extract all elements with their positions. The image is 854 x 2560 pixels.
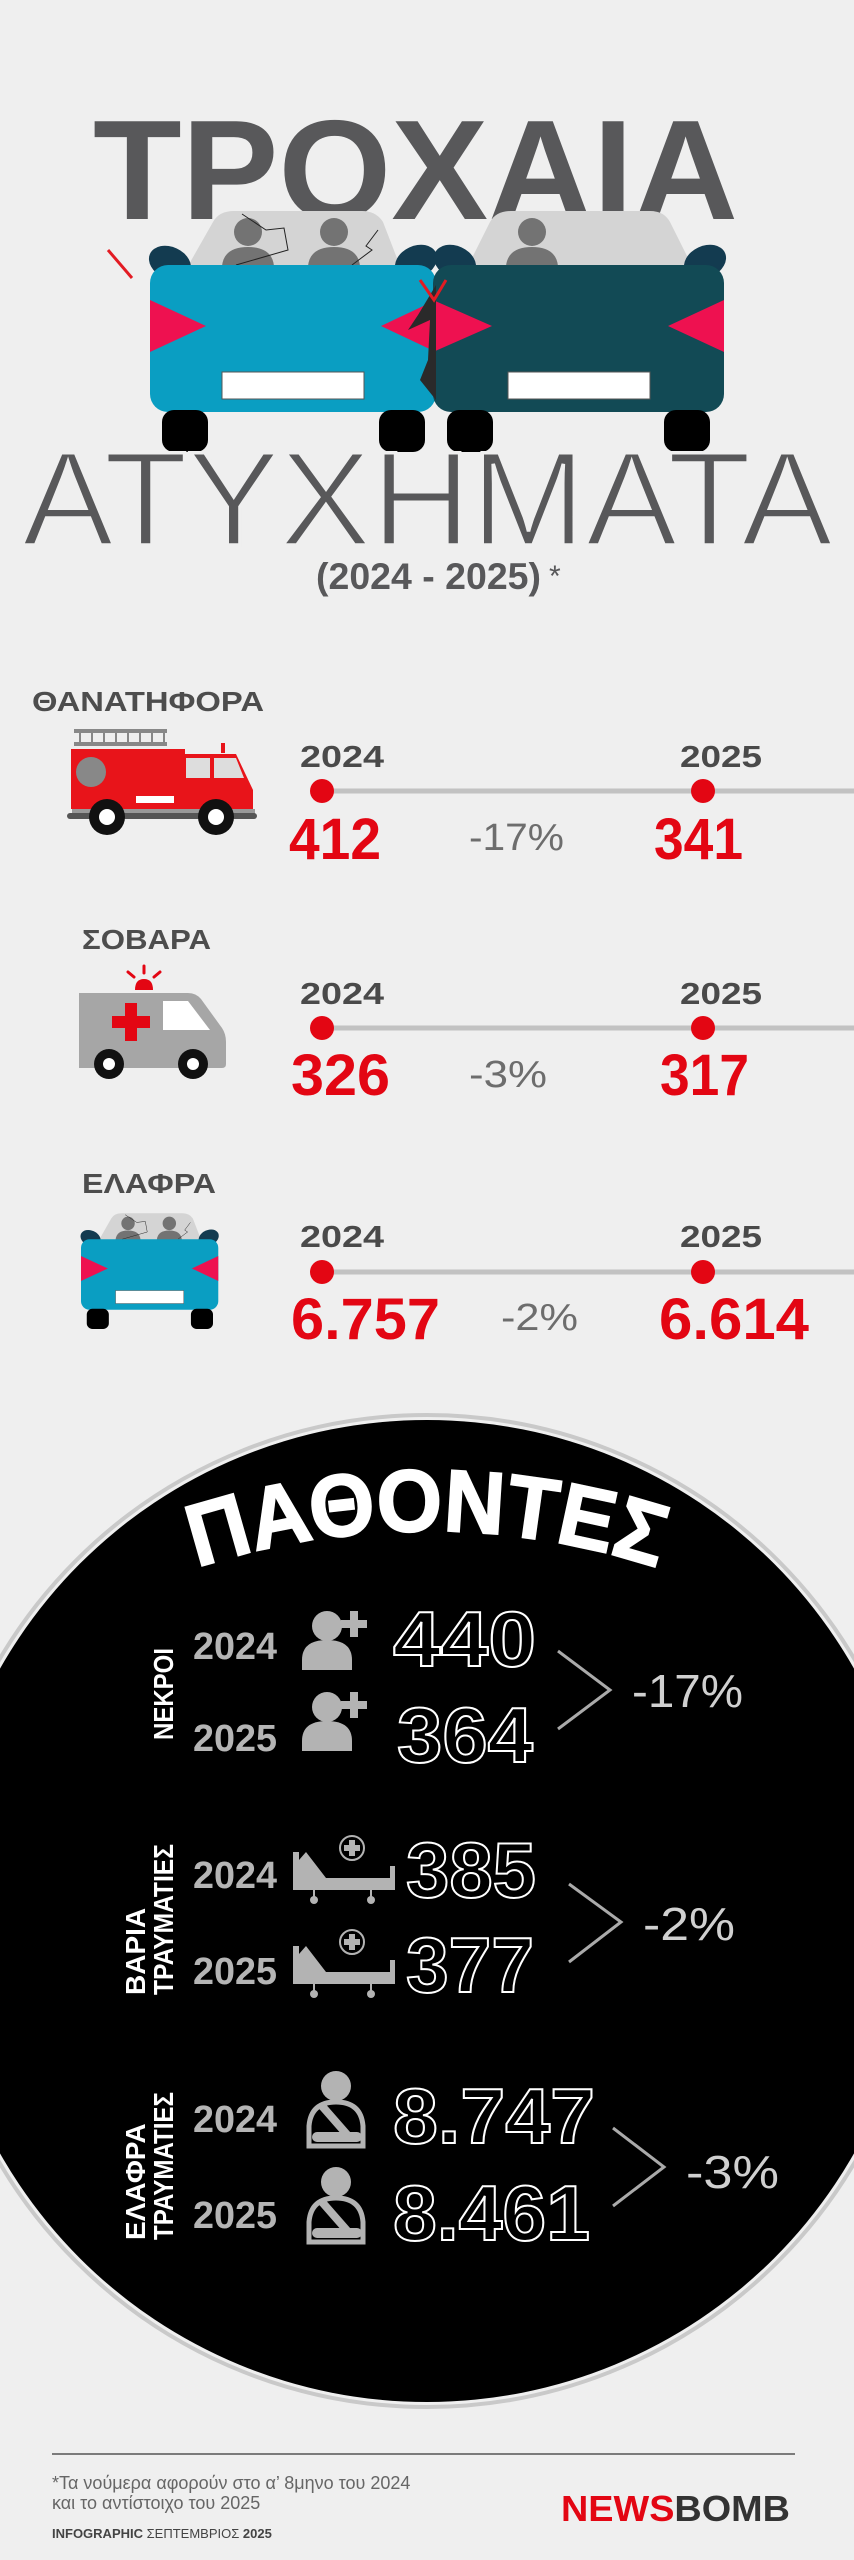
heading: ΠΑΘΟΝΤΕΣ arced: ΠΑΘΟΝΤΕΣ — [184, 1468, 670, 1568]
timeline: 2024 — [300, 1219, 385, 1254]
group: lightly injured: 8.461 — [393, 2169, 590, 2257]
title: ΤΡΟΧΑΙΑ: ΤΡΟΧΑΙΑ — [93, 91, 738, 250]
timeline: 2025 — [680, 1219, 762, 1254]
group: lightly injured: 8.747 — [393, 2072, 595, 2160]
icon: person plus — [302, 1611, 367, 1751]
group: seriously injured: ΤΡΑΥΜΑΤΙΕΣ — [148, 1844, 179, 1995]
icon: blue car — [143, 211, 443, 452]
group: lightly injured: ΕΛΑΦΡΑ — [120, 2123, 151, 2240]
group: lightly injured — [120, 2071, 779, 2257]
footnote: και το αντίστοιχο του 2025 — [52, 2493, 260, 2513]
group: lightly injured: -3% — [686, 2146, 779, 2198]
group: seriously injured: -2% — [643, 1898, 735, 1950]
timeline: -3% — [469, 1054, 547, 1096]
group: lightly injured: 2024 — [193, 2099, 277, 2141]
group: deaths: ΝΕΚΡΟΙ — [148, 1648, 179, 1740]
timeline: 2024 — [300, 976, 385, 1011]
heading: ΘΑΝΑΤΗΦΟΡΑ — [32, 686, 264, 717]
timeline — [291, 976, 854, 1108]
group: seriously injured: ΒΑΡΙΑ — [120, 1908, 151, 1995]
timeline — [289, 739, 854, 872]
timeline: -17% — [469, 817, 564, 859]
group: seriously injured: 385 — [406, 1826, 536, 1914]
panel: victims (black circle) — [0, 1413, 854, 2409]
timeline — [291, 1219, 854, 1352]
icon: dark car — [108, 211, 732, 452]
logo: NEWSBOMB: NEWSBOMB — [561, 2488, 790, 2529]
panel: light accidents — [78, 1168, 854, 1352]
timeline: 6.757 — [291, 1287, 440, 1352]
timeline: 412 — [289, 807, 381, 872]
icon: person with sling — [309, 2071, 363, 2242]
timeline: 2025 — [680, 976, 762, 1011]
timeline: 2025 — [680, 739, 762, 774]
timeline: -2% — [501, 1297, 578, 1339]
footnote — [52, 2473, 410, 2513]
subtitle: years: (2024 - 2025) — [316, 556, 541, 597]
group: lightly injured: ΤΡΑΥΜΑΤΙΕΣ — [148, 2092, 179, 2240]
group: deaths: -17% — [632, 1665, 743, 1717]
footnote: *Τα νούμερα αφορούν στο α’ 8μηνο του 2024 — [52, 2473, 410, 2493]
icon: ambulance — [79, 966, 226, 1079]
subtitle: years: * — [549, 560, 561, 593]
group: deaths: 2024 — [193, 1626, 277, 1668]
group: seriously injured: 2025 — [193, 1951, 277, 1993]
panel: fatal accidents — [32, 686, 854, 872]
icon: hospital bed — [293, 1836, 395, 1998]
group: deaths: 2025 — [193, 1718, 277, 1760]
title: ΑΤΥΧΗΜΑΤΑ: ΑΤΥΧΗΜΑΤΑ — [22, 425, 834, 574]
timeline: 317 — [660, 1043, 749, 1108]
heading: ΕΛΑΦΡΑ — [82, 1168, 216, 1199]
illustration: crashed cars — [108, 211, 732, 452]
panel: serious accidents — [79, 924, 854, 1108]
group: deaths — [148, 1595, 743, 1779]
group: lightly injured: 2025 — [193, 2195, 277, 2237]
icon: small car — [78, 1213, 221, 1329]
group: deaths: 364 — [397, 1691, 533, 1779]
group: seriously injured: 377 — [406, 1921, 534, 2009]
timeline: 341 — [654, 807, 743, 872]
group: seriously injured: 2024 — [193, 1855, 277, 1897]
credit line: INFOGRAPHIC ΣΕΠΤΕΜΒΡΙΟΣ 2025 — [52, 2526, 272, 2541]
timeline: 2024 — [300, 739, 385, 774]
timeline: 326 — [291, 1043, 390, 1108]
group: seriously injured — [120, 1826, 735, 2009]
icon: fire truck — [67, 729, 257, 835]
group: deaths: 440 — [393, 1595, 536, 1683]
heading: ΣΟΒΑΡΑ — [82, 924, 211, 955]
timeline: 6.614 — [659, 1287, 809, 1352]
